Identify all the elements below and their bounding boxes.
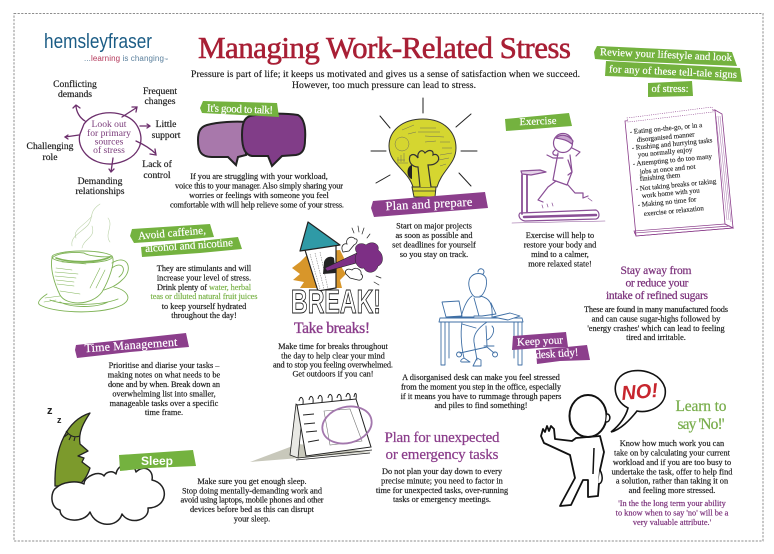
text: plan for unexpected: Do not plan your day down to every (382, 467, 503, 476)
icon: runner on treadmill (512, 134, 605, 223)
icon: break: BREAK! (291, 283, 381, 320)
quote: to know when to say 'no' will be a (616, 508, 729, 518)
icon: break (291, 222, 382, 320)
text: desk (401, 373, 562, 410)
title: Managing Work-Related Stress (198, 30, 571, 65)
text: avoid caffeine: increase your level of stress. (157, 274, 251, 282)
text: exercise: Exercise will help to (526, 231, 594, 240)
text: learn to say no: workload and if you are too busy to (613, 458, 731, 467)
text: exercise: mind to a calmer, (531, 250, 589, 259)
text: plan for unexpected: tasks or emergency meetings. (393, 495, 491, 504)
heading: learn to say no: Learn to (676, 398, 727, 415)
text: exercise: restore your body and (524, 240, 597, 250)
text: plan for unexpected (376, 467, 508, 504)
text: plan for unexpected: time for unexpected tasks, over-running (376, 486, 508, 495)
diagram: primary sources of stress: Little (156, 119, 176, 130)
text: sleep: Stop doing mentally-demanding work and (182, 486, 323, 496)
text: exercise: more relaxed state! (528, 260, 592, 268)
icon: notebook with signs of stress (625, 107, 733, 236)
text: avoid caffeine: throughout the day! (171, 311, 237, 320)
text: plan and prepare: so you stay on track. (400, 250, 468, 259)
banner: Review your lifestyle: Review your lifestyle and look (600, 47, 733, 64)
banner: Avoid caffeine: Avoid caffeine, (138, 225, 207, 242)
heading: stay away from sugars: Stay away from (620, 265, 692, 277)
logo: ...learning is changing™ (84, 54, 168, 63)
icon: notebook with signs of stress: - Rushing and hurrying tasks (631, 136, 713, 152)
text: desk: if it means you have to rummage through papers (401, 392, 561, 401)
text: time management: Prioritise and diarise your tasks – (109, 361, 220, 370)
heading: plan for unexpected (384, 430, 500, 463)
text: talk: If you are struggling with your workload, (190, 172, 328, 181)
icon: notebook with signs of stress: - Attempting to do too many (632, 152, 713, 168)
text: sleep: avoid using laptops, mobile phones and other (180, 496, 324, 504)
text: talk: voice this to your manager. Also simply sharing your (175, 182, 343, 190)
diagram: primary sources of stress: changes (145, 96, 176, 107)
sources circle with arrows (65, 105, 156, 172)
banner: Review your lifestyle: of stress: (652, 84, 689, 95)
intro text: However, too much pressure can lead to stress. (292, 80, 476, 91)
icon: notebook with signs of stress: finishing them (639, 171, 681, 183)
banner: Sleep (119, 450, 196, 471)
text: sugars: tired and irritable. (626, 333, 686, 342)
text: plan and prepare: Start on major projects (396, 222, 472, 230)
diagram: primary sources of stress: Lack of (142, 159, 173, 170)
text: take breaks: and to stop you feeling overwhelmed. (273, 360, 393, 370)
intro text (191, 69, 580, 91)
logo: hemsleyfraser (44, 31, 152, 53)
icon: speech bubbles (198, 114, 305, 166)
diagram: primary sources of stress: of stress (93, 145, 125, 156)
text: take breaks: the day to help clear your mind (281, 352, 386, 360)
heading: stay away from sugars: or reduce your (626, 278, 689, 290)
icon: coffee cup (39, 204, 128, 312)
text: plan and prepare: set deadlines for yourself (392, 240, 476, 250)
diagram: primary sources of stress: for primary (87, 128, 131, 139)
icon: moon: z (57, 415, 62, 425)
text: learn to say no: take on by calculating your current (614, 448, 731, 458)
icon: notebook with signs of stress: - Eating on-the-go, or in a (629, 121, 703, 136)
text: time management: making notes on what needs to be (108, 370, 221, 380)
diagram: primary sources of stress: Frequent (143, 86, 177, 97)
text: desk: from the moment you step in the office, especially (401, 382, 562, 392)
text: take breaks: Make time for breaks throughout (278, 342, 389, 351)
text: time management (108, 361, 221, 417)
text: learn to say no: and feeling more stressed. (629, 486, 715, 495)
banner: Sleep: Sleep (141, 454, 173, 468)
icon: calendar (250, 393, 376, 462)
icon: notebook with signs of stress: exercise or relaxation (643, 204, 705, 218)
text: avoid caffeine (150, 264, 258, 320)
banner: Time Management (75, 333, 189, 358)
text: talk: worries or feelings with someone you feel (189, 191, 329, 200)
diagram: primary sources of stress: Conflicting (53, 79, 97, 90)
banner: Plan and prepare: Plan and prepare (385, 195, 473, 213)
quote: 'In the the long term your ability (618, 499, 727, 508)
text: time management: manageable tasks over a specific (110, 399, 219, 408)
icon: notebook with signs of stress: - Not taking breaks or taking (635, 177, 717, 193)
icon: notebook with signs of stress: jobs at once and not (638, 163, 696, 176)
text: avoid caffeine: to keep yourself hydrated (162, 302, 247, 311)
icon: notebook with signs of stress: - Making no time for (637, 195, 697, 209)
icon: No speech bubble: NO! (621, 380, 659, 405)
diagram: primary sources of stress: sources (95, 136, 124, 148)
text: talk: comfortable with will help relieve some of your stress. (170, 200, 344, 210)
banner: Keep your desk tidy (512, 332, 590, 364)
text: desk: and piles to find something! (434, 401, 528, 410)
diagram: primary sources of stress: Challenging (27, 141, 74, 152)
text: sugars (584, 305, 728, 342)
banner: It's good to talk: It's good to talk! (207, 102, 273, 117)
banner: Keep your desk tidy: Keep your (517, 334, 564, 349)
banner: Review your lifestyle: for any of these tell-tale signs (609, 64, 737, 81)
banner: Exercise (505, 113, 572, 131)
text: learn to say no: undertake the task, offer to help find (612, 468, 733, 476)
heading: plan for unexpected: Plan for unexpected (384, 430, 500, 446)
text: sleep (180, 477, 324, 524)
quote: very valuable attribute.' (633, 518, 712, 527)
banner: Avoid caffeine (130, 224, 242, 257)
diagram: primary sources of stress: role (43, 152, 57, 163)
heading: stay away from sugars: intake of refined sugars (606, 290, 709, 302)
banner: Exercise: Exercise (519, 116, 557, 128)
icon: moon: z (47, 405, 53, 417)
text: desk: A disorganised desk can make you feel stressed (402, 373, 561, 382)
diagram: primary sources of stress: Demanding (78, 176, 123, 187)
text: avoid caffeine: teas or diluted natural fruit juices (150, 292, 258, 301)
diagram: primary sources of stress: control (143, 170, 171, 181)
icon: notebook with signs of stress: disorganised manner (636, 130, 696, 144)
banner: Review your lifestyle (594, 46, 742, 97)
diagram: primary sources of stress: relationships (75, 186, 125, 197)
icon: light bulb (371, 98, 477, 197)
diagram: primary sources of stress: support (152, 130, 181, 141)
logo (44, 31, 168, 63)
banner: Plan and prepare (371, 192, 488, 217)
quote (616, 499, 729, 527)
icon: cloud (52, 465, 164, 524)
text: plan for unexpected: precise minute; you need to factor in (381, 476, 504, 486)
heading: learn to say no: say 'No!' (678, 416, 725, 433)
banner: Avoid caffeine: alcohol and nicotine (145, 237, 233, 255)
icon: person saying no (541, 395, 610, 506)
diagram: primary sources of stress (27, 79, 181, 197)
text: exercise (524, 231, 597, 268)
diagram: primary sources of stress: demands (58, 89, 92, 100)
heading: stay away from sugars (606, 265, 709, 302)
text: sugars: These are found in many manufactured foods (584, 305, 728, 314)
intro text: Pressure is part of life; it keeps us motivated and gives us a sense of satisfaction when we succeed. (191, 69, 580, 80)
icon: notebook with signs of stress: you normally enjoy (637, 146, 693, 159)
icon: woman at desk (439, 269, 523, 366)
heading: plan for unexpected: or emergency tasks (386, 447, 499, 463)
text: avoid caffeine: Drink plenty of water, herbal (157, 283, 252, 292)
text: take breaks: Get outdoors if you can! (292, 370, 374, 378)
banner: Time Management: Time Management (84, 335, 178, 355)
icon: notebook with signs of stress: work home with you (641, 186, 701, 200)
text: sleep: your sleep. (234, 514, 270, 524)
text: learn to say no (612, 439, 733, 495)
icon: No speech bubble (611, 371, 665, 432)
text: take breaks (273, 342, 393, 378)
text: plan and prepare: as soon as possible and (396, 231, 473, 240)
text: time management: time frame. (145, 408, 183, 417)
diagram: primary sources of stress: Look out (92, 119, 127, 130)
heading: learn to say no (676, 398, 727, 433)
text: talk (170, 172, 344, 210)
text: avoid caffeine: They are stimulants and will (157, 264, 252, 273)
heading: Take breaks: Take breaks! (294, 320, 370, 337)
text: learn to say no: a solution, rather than taking it on (616, 476, 729, 486)
icon: moon (47, 405, 90, 486)
text: learn to say no: Know how much work you can (620, 439, 725, 448)
text: sleep: Make sure you get enough sleep. (197, 477, 307, 486)
banner: Keep your desk tidy: desk tidy! (535, 347, 579, 361)
text: sugars: and can cause sugar-highs followed by (592, 314, 721, 324)
text: plan and prepare (392, 222, 476, 259)
text: time management: done and by when. Break down an (108, 380, 221, 389)
text: time management: overwhelming list into smaller, (112, 390, 216, 398)
text: sugars: 'energy crashes' which can lead to feeling (587, 324, 725, 333)
text: sleep: devices before bed as this can disrupt (190, 505, 315, 514)
